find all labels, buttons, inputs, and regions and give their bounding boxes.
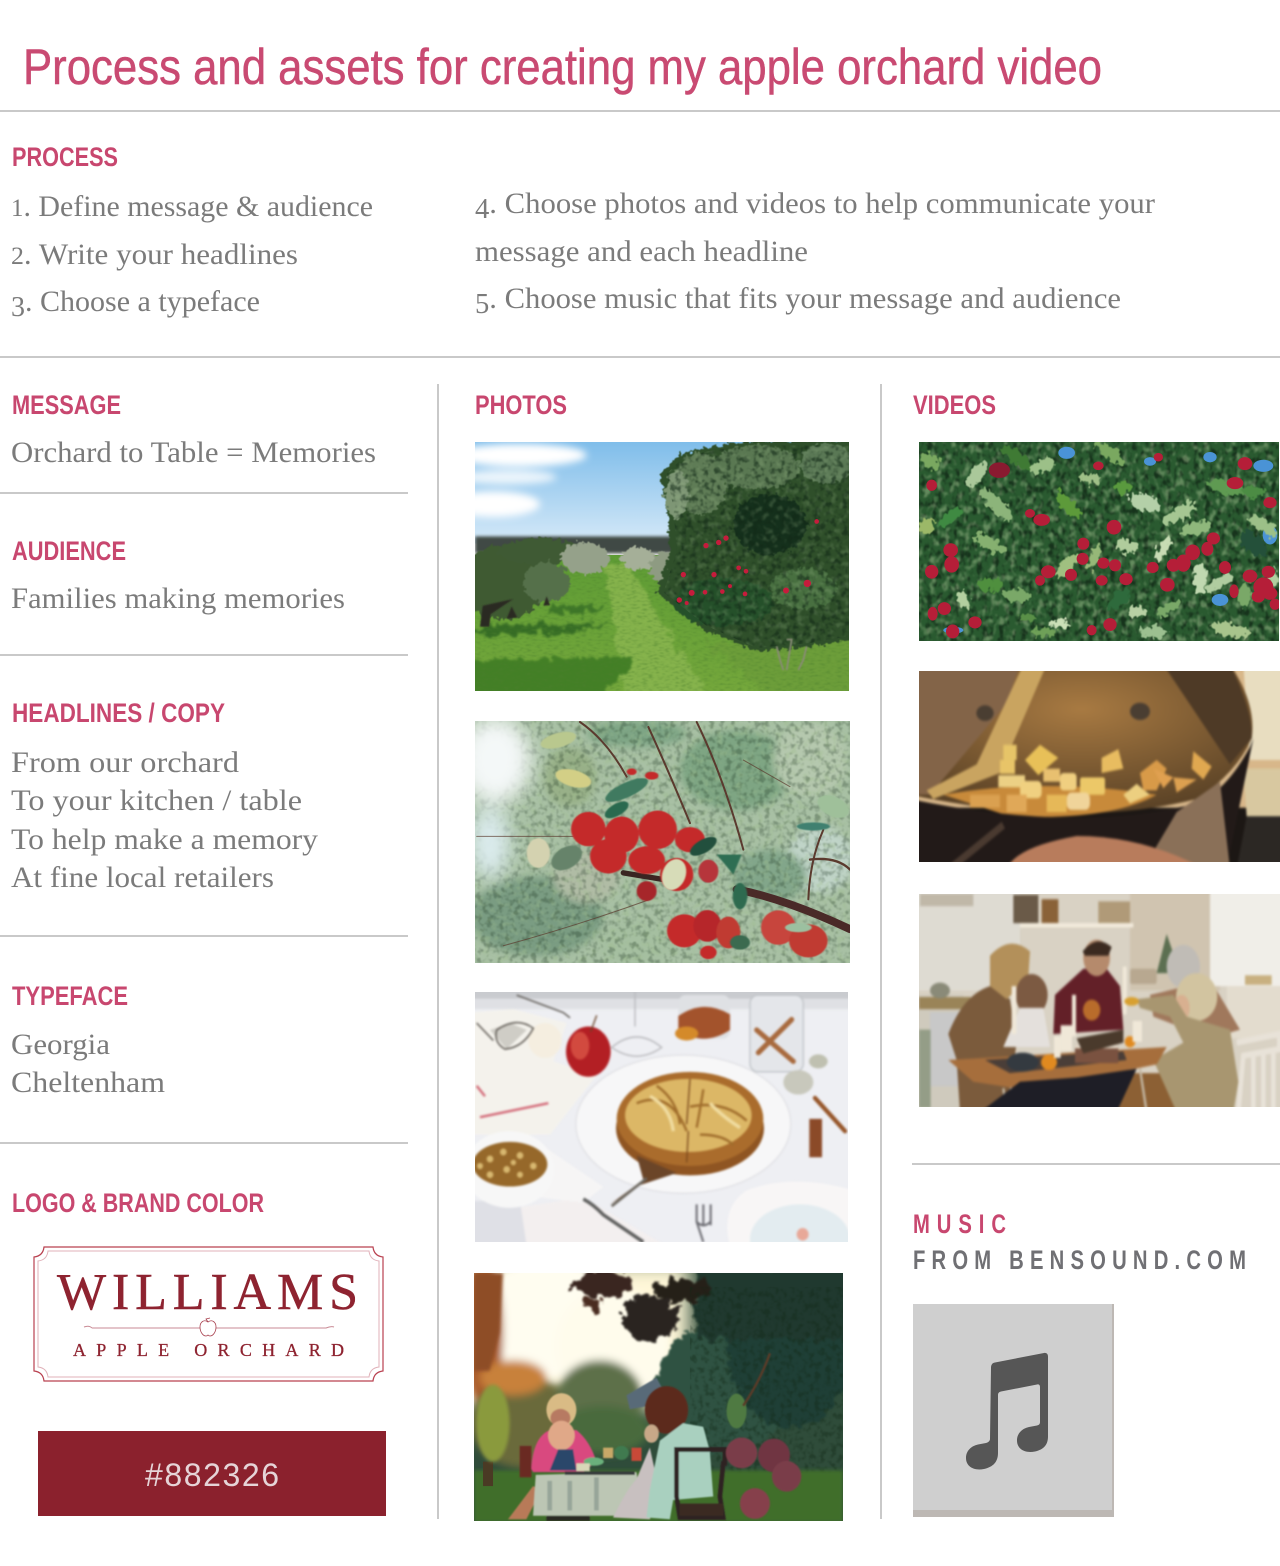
panel: typeface: Cheltenham [11,1066,165,1099]
process steps 1 to 3: Choose a typeface [40,285,260,318]
process steps 4 and 5: message and each headline [475,235,808,268]
process steps 4 and 5: . [489,187,497,220]
hanging apples [726,1438,757,1468]
panel: headlines and copy: From our orchard [11,746,239,779]
process steps 1 to 3: 3 [11,292,25,323]
brand color swatch: #882326 [145,1457,279,1493]
panel: message: Orchard to Table = Memories [11,436,376,469]
person in pink [531,1430,596,1472]
icon: apple [200,1318,216,1336]
table [533,1472,643,1516]
video still: family at kitchen table [919,894,1280,1107]
heading: music: MUSIC [913,1209,1006,1240]
chair [677,1449,725,1518]
panel: headlines and copy: HEADLINES / COPY [12,698,225,728]
panel: headlines and copy: At fine local retailers [11,861,274,894]
process steps 4 and 5: 5 [475,289,489,320]
photo: family at orchard table [474,1273,843,1521]
panel: headlines and copy: To your kitchen / table [11,784,302,817]
panel: headlines and copy: To help make a memory [11,823,318,856]
panel: logo and brand color: LOGO & BRAND COLOR [12,1188,264,1218]
panel: typeface: TYPEFACE [12,981,128,1011]
process steps 4 and 5 [475,187,1155,320]
panel: message: MESSAGE [12,390,121,420]
person with curly hair [645,1386,688,1434]
process steps 4 and 5: Choose music that fits your message and audience [504,282,1108,315]
process steps 1 to 3: . [25,285,33,318]
panel: audience: AUDIENCE [12,536,126,566]
panel: typeface: Georgia [11,1028,110,1061]
process steps 4 and 5: 4 [475,194,489,225]
panel: process [11,142,1155,323]
process steps 1 to 3: 2. Write your headlines [11,238,298,271]
video still: apples cooking in pan [919,671,1280,862]
panel: headlines and copy [11,698,318,894]
panel: audience [11,536,345,615]
process steps 1 to 3 [11,190,373,323]
process steps 1 to 3: 1. Define message & audience [11,190,373,223]
photo: orchard row [475,442,849,691]
photo: apple pie on table [475,992,848,1242]
icon tile: music note [913,1304,1114,1517]
heading: videos: VIDEOS [913,390,996,420]
panel: typeface [11,981,165,1099]
panel: message [11,390,376,469]
process steps 4 and 5: . [489,282,497,315]
heading: process: PROCESS [12,142,118,172]
brand color swatch [38,1431,386,1516]
process steps 4 and 5: Choose photos and videos to help communicate your [504,187,1140,220]
music source: FROM BENSOUND.COM [913,1245,1246,1276]
logo: Williams Apple Orchard: APPLE ORCHARD [73,1340,344,1360]
heading: photos: PHOTOS [475,390,567,420]
photo: apples on branch [475,721,850,963]
video still: apples and leaves [919,442,1279,789]
title: Process and assets for creating my apple orchard video [23,39,1102,95]
panel: logo and brand color [12,1188,386,1516]
logo: Williams Apple Orchard: WILLIAMS [57,1264,358,1321]
panel: audience: Families making memories [11,582,345,615]
panel: music [913,1209,1246,1517]
logo: Williams Apple Orchard [34,1247,383,1381]
